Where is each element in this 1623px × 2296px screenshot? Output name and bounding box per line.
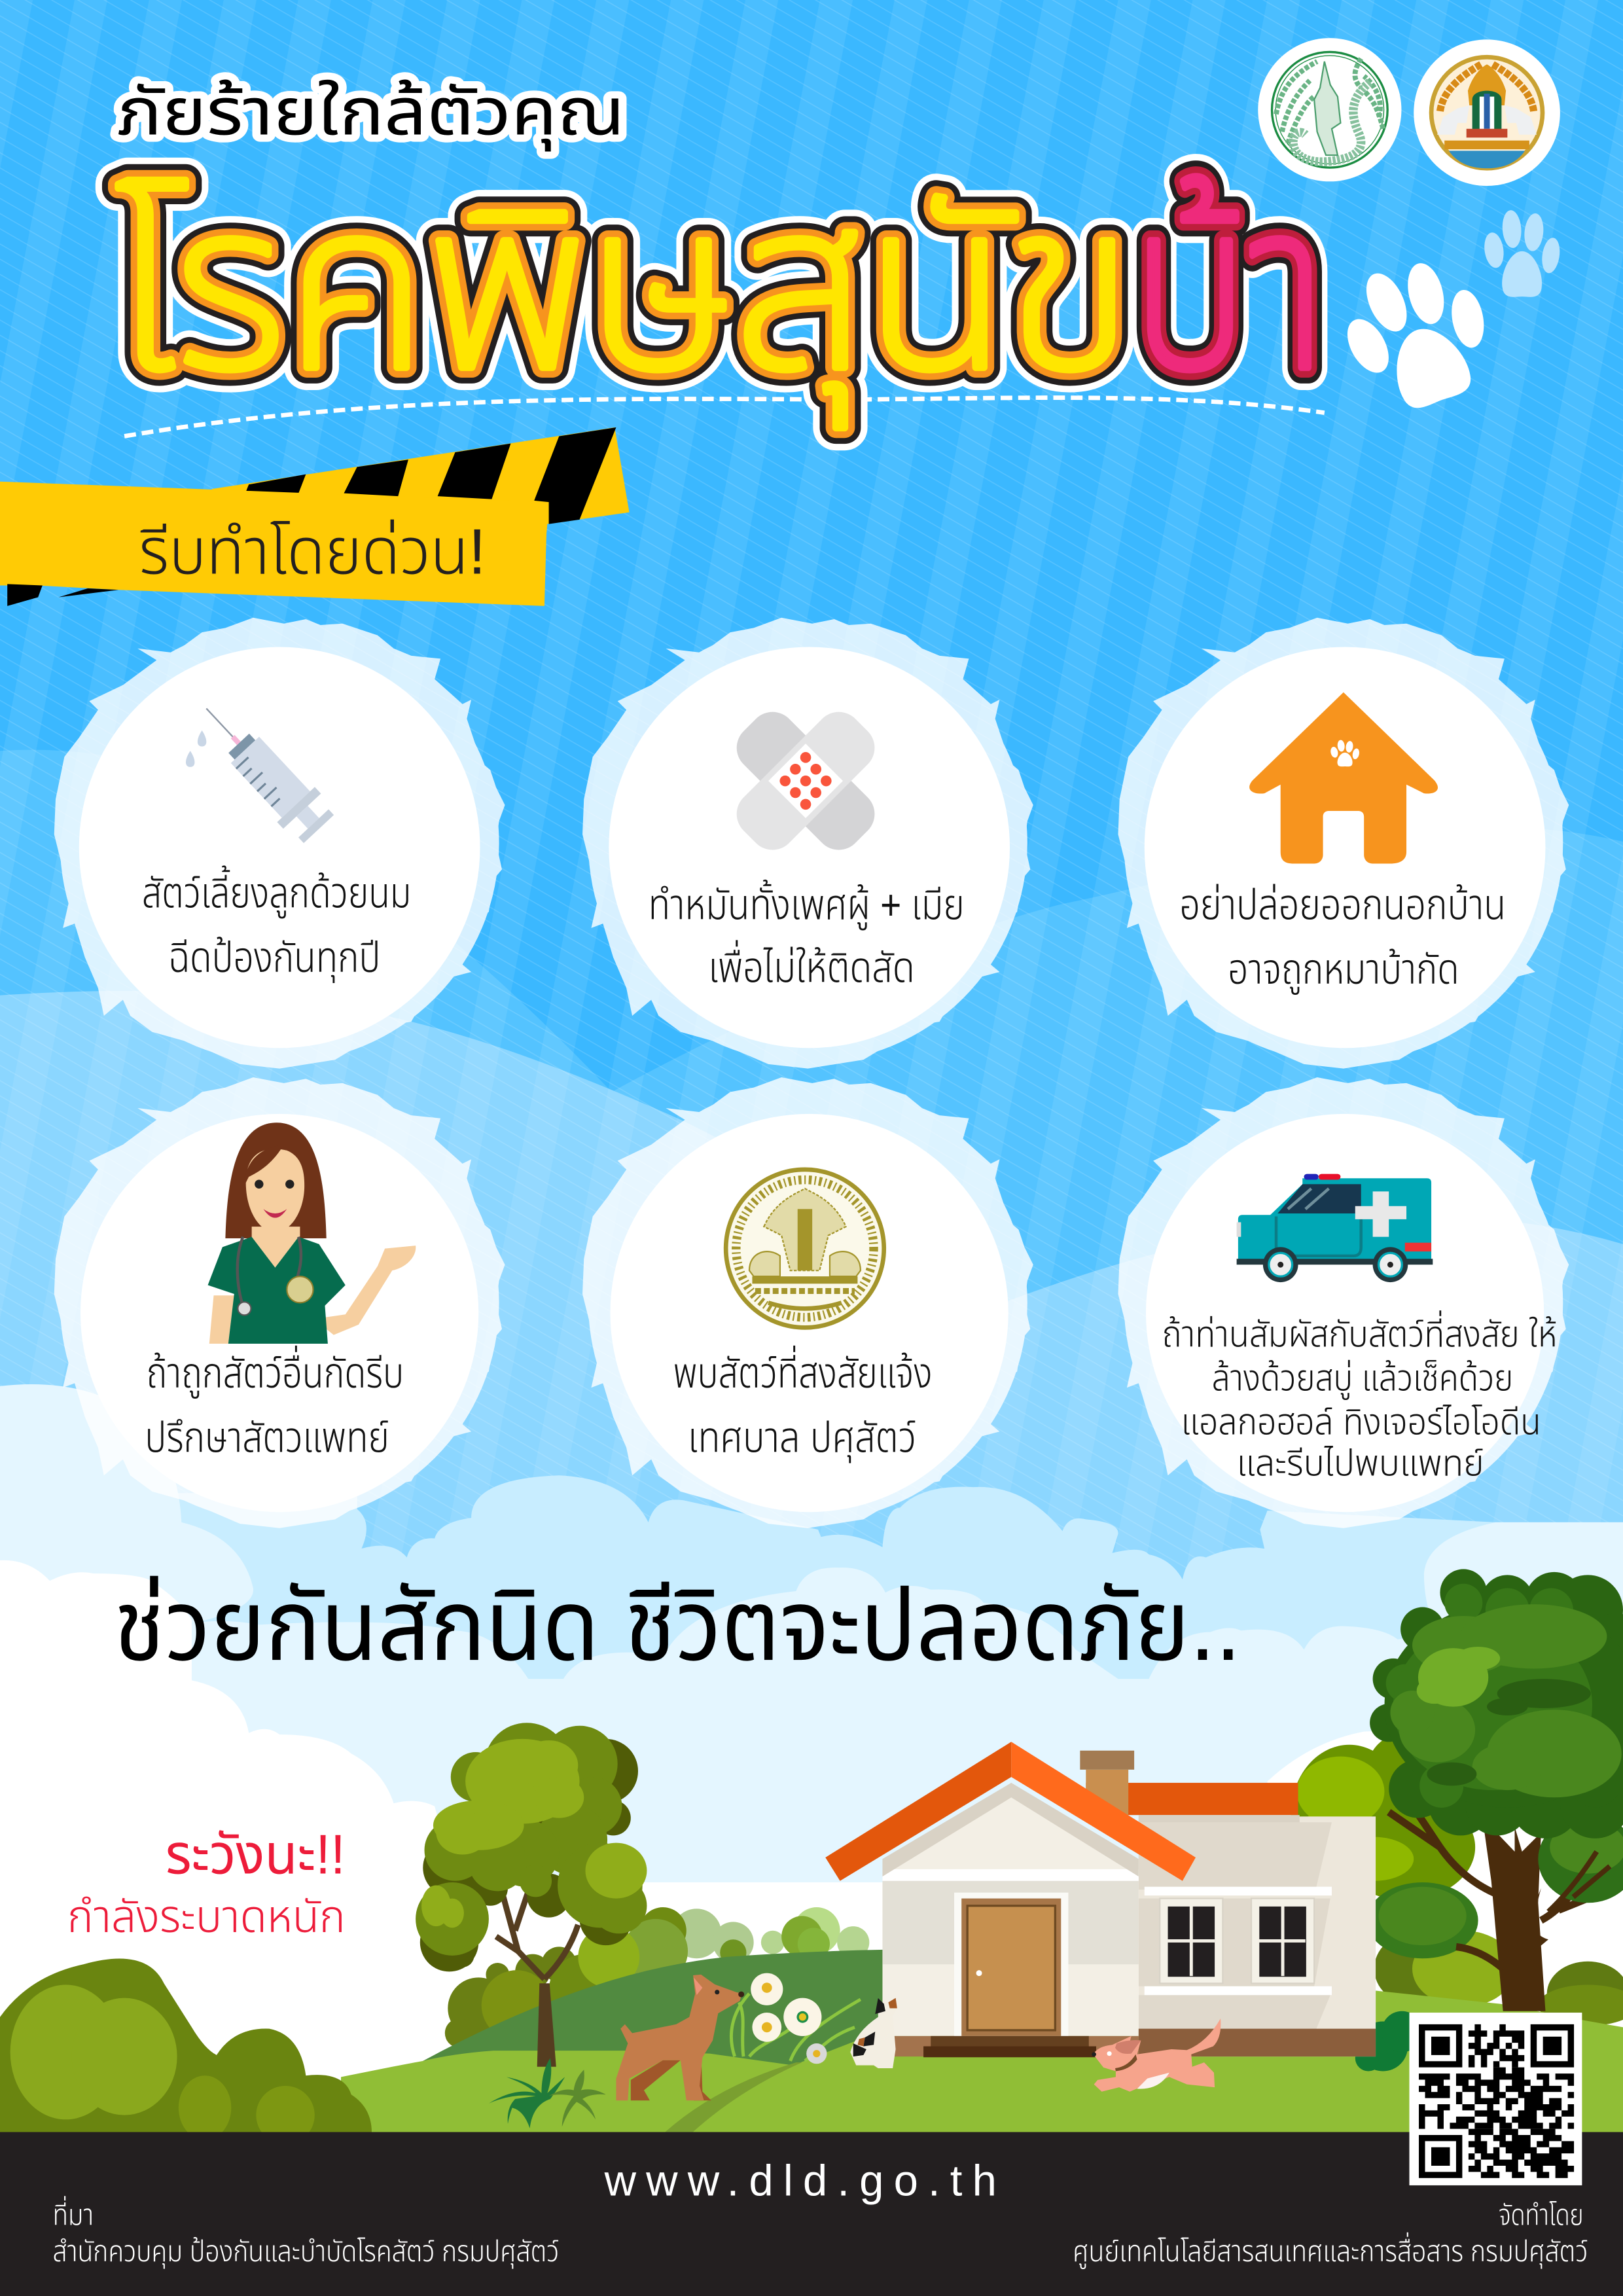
source label: สำนักควบคุม ป้องกันและบำบัดโรคสัตว์ กรมปศุสัตว์ [53,2236,559,2269]
big tree right [1291,1569,1623,2011]
icon: gold seal [726,1170,884,1327]
small pale paw [1482,209,1562,297]
QR code [1410,2013,1582,2185]
subtitle: ภัยร้ายใกล้ตัวคุณ [117,76,625,152]
main title: โรคพิษสุนัข [114,158,1133,429]
caption: ฉีดป้องกันทุกปี [168,933,380,983]
back bushes right [1374,1931,1623,2026]
main title: บ้า [1133,158,1326,416]
caption: พบสัตว์ที่สงสัยแจ้ง [673,1345,932,1397]
icon: droplets [186,730,206,767]
caption: อาจถูกหมาบ้ากัด [1228,945,1459,995]
icon: paw on house [1330,740,1360,766]
icon: house with paw [1249,692,1438,863]
source label: ที่มา [53,2195,94,2231]
caption: และรีบไปพบแพทย์ [1237,1442,1484,1483]
grass clump [489,2058,606,2128]
caption: เทศบาล ปศุสัตว์ [688,1413,916,1463]
panel: see a vet [54,1077,505,1528]
warning text [67,1824,346,1942]
flowers [731,1973,861,2064]
house [825,1742,1376,2057]
organiser label [1073,2199,1588,2269]
website: www.dld.go.th [604,2157,997,2206]
main title: โรคพิษสุนัข [114,158,1133,429]
steps [931,2036,1089,2047]
panel: report to authorities [582,1077,1033,1528]
caption: ถ้าถูกสัตว์อื่นกัดรีบ [147,1345,404,1399]
tree left [416,1723,647,2067]
icon: bandage [727,702,884,859]
green hill [423,1950,884,2079]
caution ribbon [0,427,630,606]
caption: อย่าปล่อยออกนอกบ้าน [1179,880,1506,928]
footer band [0,2132,1623,2296]
large white paw [1325,240,1510,425]
warning text: ระวังนะ!! [166,1824,346,1886]
organiser label: จัดทำโดย [1499,2199,1584,2231]
main title: บ้า [1133,158,1326,416]
caption: ล้างด้วยสบู่ แล้วเช็คด้วย [1212,1357,1513,1401]
caption: ทำหมันทั้งเพศผู้ + เมีย [649,879,965,930]
shrub beside house [1355,2011,1423,2071]
dashed curve under title [124,398,1325,436]
pink running dog [1092,2018,1221,2092]
warning text: กำลังระบาดหนัก [67,1891,346,1942]
main title: โรคพิษสุนัข [114,158,1133,429]
icon: syringe [188,691,338,846]
caption: แอลกอฮอล์ ทิงเจอร์ไอโอดีน [1181,1401,1541,1443]
brown dog [616,1975,744,2100]
ribbon text: รีบทำโดยด่วน! [139,516,486,588]
caption: ถ้าท่านสัมผัสกับสัตว์ที่สงสัย ให้ [1162,1310,1557,1354]
door [954,1893,1068,2036]
logo: green department seal [1258,38,1401,181]
icon: ambulance [1237,1174,1433,1282]
background clouds [0,1384,1623,2086]
caption: เพื่อไม่ให้ติดสัด [708,940,915,992]
ground [341,1990,1623,2132]
path on lawn [664,2062,802,2132]
calico cat [850,1998,897,2068]
main title: โรคพิษสุนัข [114,158,1133,429]
caption: สัตว์เลี้ยงลูกด้วยนม [142,865,411,919]
panel: vaccinate pets [54,618,505,1069]
caption: ปรึกษาสัตวแพทย์ [145,1413,389,1461]
far hedge behind house [445,1907,869,2048]
main title: บ้า [1133,158,1326,416]
left bushes [0,1959,372,2144]
panel: first aid [1118,1077,1569,1528]
panel: neuter [582,618,1033,1069]
windows [1160,1899,1222,1983]
source label [53,2195,559,2269]
nurse illustration [208,1122,416,1344]
subtitle: ภัยร้ายใกล้ตัวคุณ [117,76,625,152]
logo: provincial emblem [1414,39,1560,186]
panel: keep indoors [1118,618,1569,1069]
main title: บ้า [1133,158,1326,416]
slogan: ช่วยกันสักนิด ชีวิตจะปลอดภัย.. [114,1570,1241,1681]
